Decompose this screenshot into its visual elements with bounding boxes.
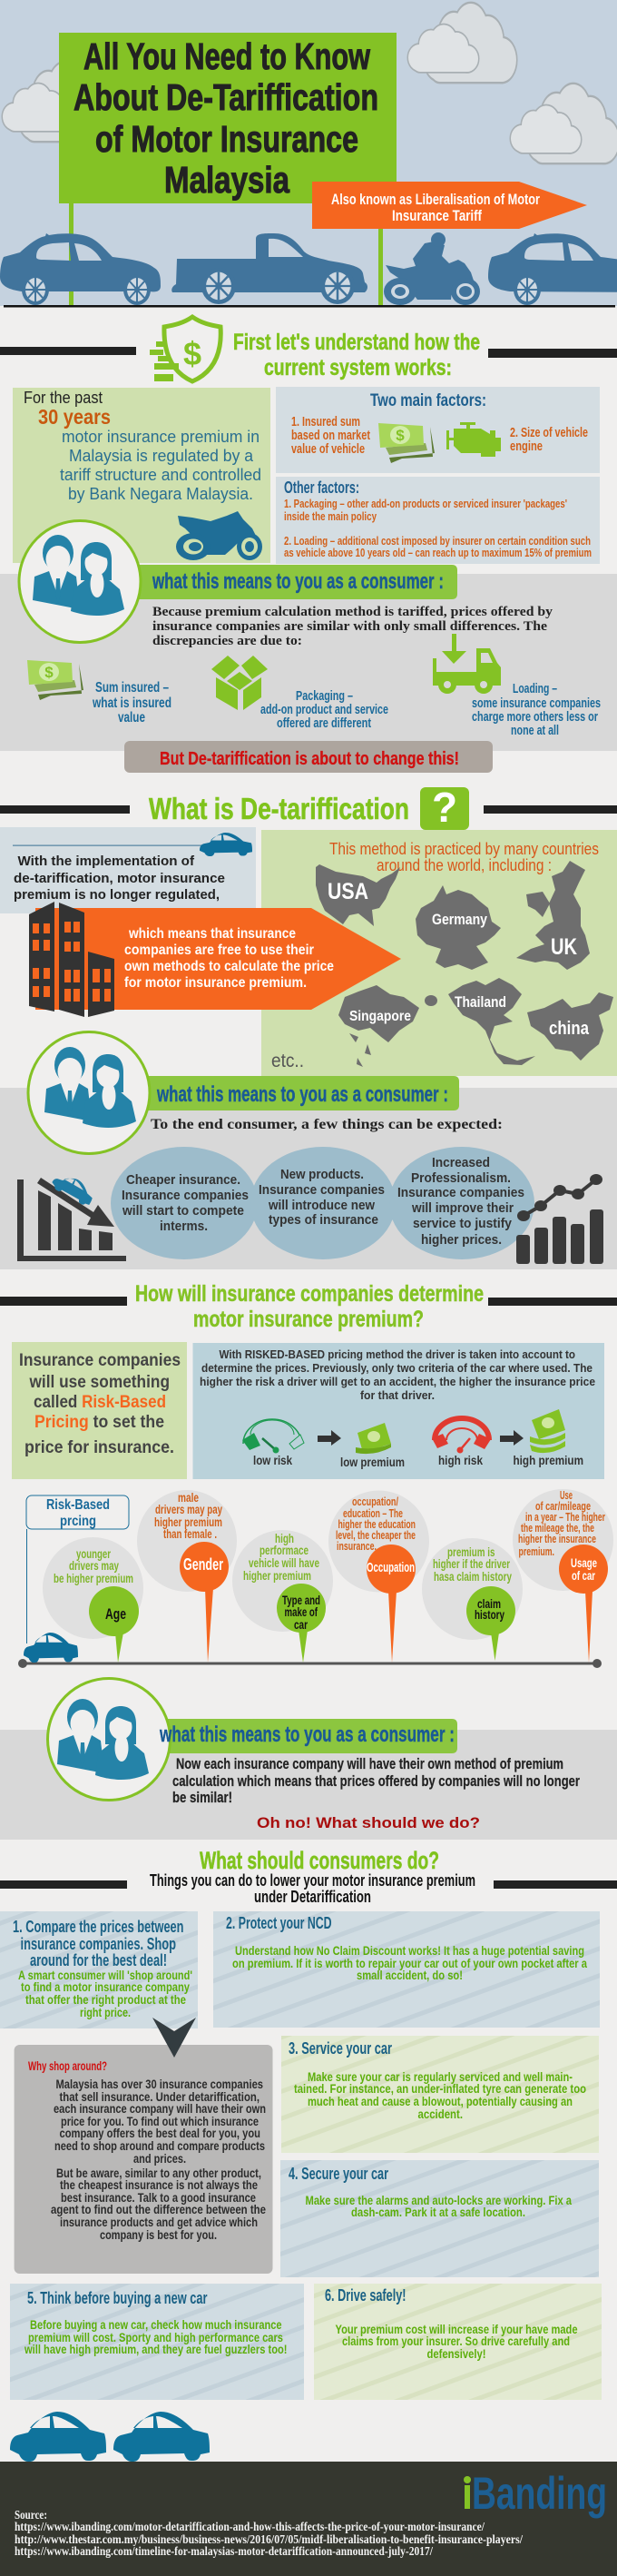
factor bubbles	[43, 1489, 613, 1640]
circle: cheaper insurance: will start to compete	[122, 1203, 244, 1219]
sum insured text	[92, 680, 171, 725]
band: consumer meaning 2: To the end consumer, a few things can be expected:	[151, 1117, 503, 1132]
orange arrow sign: Also known as Liberalisation of Motor	[331, 191, 540, 208]
icon: low premium money	[356, 1423, 391, 1454]
orange arrow: free to use own methods	[35, 908, 401, 1010]
cloud top right	[408, 4, 516, 82]
panel: tip 6 drive safely: defensively!	[426, 2347, 486, 2361]
gender text	[154, 1491, 222, 1541]
arrow text: own methods to calculate the price	[124, 959, 334, 974]
cloud left	[3, 63, 111, 141]
age text	[54, 1547, 133, 1585]
circle: professionalism: higher prices.	[421, 1232, 502, 1248]
claim text: premium is	[447, 1545, 495, 1559]
circle: professionalism: will improve their	[411, 1200, 514, 1216]
pin: age	[89, 1586, 139, 1663]
pin: usage of car: Usage	[571, 1555, 597, 1570]
sign poles	[69, 203, 383, 306]
circle: professionalism: service to justify	[413, 1216, 513, 1231]
panel: tip 5 new car: Before buying a new car, check how much insurance	[30, 2318, 282, 2332]
section heading: what is de-tariffication: What is De-tariffication	[149, 792, 409, 825]
banner: change	[124, 741, 493, 773]
section heading: first understand	[0, 317, 617, 381]
panel: why shop around: Why shop around?	[28, 2058, 107, 2073]
panel: tip 1 compare	[0, 1911, 198, 2028]
panel: risk-based pricing intro	[12, 1342, 187, 1479]
sources: http://www.thestar.com.my/business/business-news/2016/07/05/midf-liberalisation-to-benefit-insurance-players/	[15, 2533, 524, 2547]
circle: cheaper insurance: interms.	[160, 1219, 208, 1234]
map: USA: USA	[328, 879, 368, 904]
age text: drivers may	[69, 1559, 119, 1573]
why shop around text: But be aware, similar to any other product,	[56, 2166, 261, 2180]
map: Germany: Germany	[432, 911, 487, 928]
sum insured text: value	[118, 710, 145, 725]
timeline: risk-based pricing factors	[18, 1489, 613, 1668]
occupation text: education – The	[343, 1507, 403, 1520]
icon: car on arrow	[50, 1169, 97, 1209]
panel: tip 3 service	[281, 2036, 599, 2153]
panel: tip 6 drive safely: 6. Drive safely!	[325, 2285, 406, 2305]
arrow text: for motor insurance premium.	[124, 975, 307, 991]
panel: risk-based pricing intro: called Risk-Based	[34, 1393, 166, 1412]
icon: buildings	[29, 902, 114, 1017]
panel: countries: etc..	[271, 1051, 304, 1071]
footer	[0, 2462, 617, 2576]
occupation text	[336, 1495, 416, 1553]
band: consumer meaning 3	[0, 1678, 617, 1840]
band: consumer meaning 3: what this means to you as a consumer :	[159, 1722, 455, 1747]
loading text	[472, 681, 601, 738]
pin: claim history: claim	[477, 1596, 501, 1611]
map: Germany	[416, 885, 501, 970]
pin: usage of car: of car	[572, 1568, 595, 1583]
claim text: hasa claim history	[434, 1570, 512, 1584]
map: UK	[516, 861, 590, 970]
explanation paragraph: insurance companies are similar with only small differences. The	[152, 619, 547, 634]
band: consumer meaning 3: Oh no! What should we do?	[257, 1814, 480, 1831]
expectation circles	[111, 1147, 534, 1259]
sources: https://www.ibanding.com/timeline-for-malaysias-motor-detariffication-announced-july-2017/	[15, 2545, 434, 2559]
circle: professionalism: Professionalism.	[411, 1170, 511, 1186]
type text: vehicle will have	[249, 1556, 319, 1570]
regulation text: by Bank Negara Malaysia.	[68, 485, 253, 503]
heading text: current system works:	[264, 355, 452, 380]
panel: tip 3 service: 3. Service your car	[289, 2038, 392, 2058]
panel: two main factors: Two main factors:	[370, 391, 486, 410]
why shop around text: best insurance. Talk to a good insurance	[61, 2191, 256, 2205]
tip 1 text	[18, 1969, 192, 2019]
icon: high premium money	[530, 1409, 565, 1453]
title panel	[59, 33, 397, 203]
title: About De-Tariffication	[73, 76, 378, 118]
icon: sedan left	[0, 233, 161, 305]
map: China: china	[549, 1019, 590, 1039]
consumer pill: what this means to you as a consumer :	[152, 569, 444, 594]
usage text: premium.	[519, 1545, 554, 1558]
chart: rising prices	[516, 1174, 603, 1264]
panel: risk-based pricing intro: price for insurance.	[24, 1438, 174, 1457]
panel: tip 2 protect NCD: 2. Protect your NCD	[226, 1913, 332, 1932]
banner: change: But De-tariffication is about to change this!	[160, 749, 459, 769]
factor 2 text: 2. Size of vehicle	[510, 426, 588, 440]
gender text: male	[178, 1491, 199, 1505]
pin: usage of car	[559, 1545, 608, 1663]
circle: cheaper insurance	[111, 1147, 258, 1259]
pin: occupation	[367, 1545, 416, 1663]
panel: 30 years: 30 years	[38, 405, 111, 429]
gender text: higher premium	[154, 1515, 222, 1529]
implementation text	[14, 854, 225, 903]
arrow	[318, 1430, 341, 1446]
section heading: how will companies determine: motor insurance premium?	[193, 1307, 424, 1332]
pin: gender	[180, 1542, 229, 1663]
header scene	[0, 0, 617, 307]
occupation text: occupation/	[352, 1495, 398, 1508]
why shop around text: company is best for you.	[100, 2228, 217, 2242]
packaging text	[260, 688, 388, 731]
consequence paragraph	[172, 1755, 580, 1806]
panel: risked-based explanation: higher the risk a driver will get to an accident, the higher the insurance price	[200, 1375, 595, 1388]
circle: new products: types of insurance	[269, 1212, 378, 1228]
icon: box	[211, 656, 268, 710]
map: China	[527, 992, 613, 1061]
map: Thailand	[448, 978, 535, 1065]
ground line	[4, 305, 615, 307]
panel: risked-based explanation: With RISKED-BASED pricing method the driver is taken into account to	[220, 1347, 575, 1361]
icon: pickup	[171, 233, 367, 304]
why shop around text: company offers the best deal for you, you	[60, 2127, 260, 2140]
panel: tip 1 compare: insurance companies. Shop	[20, 1934, 176, 1953]
map: Singapore: Singapore	[349, 1009, 411, 1024]
icon: question box: ?	[432, 784, 457, 831]
cloud right	[511, 84, 617, 163]
risk-based label box	[26, 1495, 129, 1529]
panel: tip 2 protect NCD: small accident, do so!	[357, 1969, 463, 1982]
icon: motorbike with rider	[384, 232, 480, 305]
why shop around text: need to shop around and compare products	[54, 2139, 265, 2153]
icon: engine	[446, 422, 501, 457]
why shop around text	[51, 2078, 266, 2242]
pin: gender: Gender	[183, 1555, 223, 1574]
circle: professionalism: Insurance companies	[397, 1185, 524, 1200]
regulation text: tariff structure and controlled	[60, 466, 261, 484]
panel: why shop around	[15, 2045, 272, 2274]
panel: risk-based pricing intro: will use something	[29, 1373, 170, 1392]
factor 1 text: 1. Insured sum	[291, 415, 360, 429]
panel: 30 years: For the past	[24, 389, 103, 407]
sum insured text: what is insured	[92, 696, 171, 711]
heading text: First let's understand how the	[233, 330, 480, 355]
factor 1 text	[291, 415, 370, 457]
arrow: down to why shop around	[152, 2018, 196, 2058]
sources: Source:	[15, 2509, 47, 2522]
section heading: what should consumers do	[0, 1847, 617, 1906]
icon: shield with coins: $	[183, 335, 201, 372]
title: of Motor Insurance	[95, 118, 358, 160]
panel: risk-based pricing intro: Pricing to set the	[34, 1413, 164, 1432]
panel: risked-based explanation	[192, 1343, 604, 1479]
tip 1 text: A smart consumer will 'shop around'	[18, 1969, 192, 1982]
explanation paragraph	[152, 605, 553, 648]
panel: tip 4 secure: 4. Secure your car	[289, 2164, 388, 2183]
panel: other factors: Other factors:	[284, 479, 359, 497]
orange arrow sign: Insurance Tariff	[392, 207, 482, 224]
icon: money	[27, 660, 83, 700]
title: Malaysia	[164, 159, 290, 201]
icon: low risk gauge	[242, 1419, 304, 1453]
why shop around text: agent to find out the difference between the	[51, 2203, 266, 2216]
loading text: Loading –	[513, 681, 557, 696]
panel: tip 1 compare: around for the best deal!	[30, 1950, 167, 1969]
map: Thailand: Thailand	[455, 993, 506, 1011]
sources	[15, 2509, 524, 2559]
panel: implementation	[0, 827, 256, 913]
icon: sedan right	[488, 233, 617, 305]
age text: be higher premium	[54, 1572, 133, 1585]
occupation text: higher the education	[338, 1518, 416, 1531]
chart: falling prices	[17, 1169, 126, 1261]
panel: tip 4 secure: dash-cam. Park it at a safe location.	[351, 2206, 525, 2219]
title: All You Need to Know	[83, 35, 370, 77]
sources: https://www.ibanding.com/motor-detariffication-and-how-this-affects-the-price-of-your-motor-insurance/	[15, 2521, 485, 2534]
panel: tip 6 drive safely	[314, 2284, 602, 2400]
pin: type and make of car	[277, 1584, 326, 1663]
type text: high	[275, 1532, 294, 1545]
icon: question box	[420, 784, 469, 831]
risk-based label box: prcing	[60, 1514, 96, 1529]
panel: tip 1 compare: 1. Compare the prices between	[13, 1917, 183, 1936]
icon: small car	[200, 833, 252, 856]
why shop around text: insurance products and get advice which	[60, 2216, 258, 2229]
occupation text: insurance.	[337, 1540, 377, 1553]
tip 1 text: to find a motor insurance company	[21, 1980, 190, 1994]
panel: other factors	[276, 477, 600, 564]
consequence paragraph: be similar!	[172, 1789, 232, 1806]
risk labels: high risk	[438, 1453, 483, 1467]
map: Singapore	[338, 985, 437, 1067]
pin: occupation: Occupation	[367, 1560, 415, 1575]
circle: professionalism: Increased	[432, 1155, 490, 1170]
icon: high risk gauge	[432, 1418, 491, 1453]
countries text: around the world, including :	[377, 856, 552, 874]
pin: claim history	[466, 1586, 515, 1661]
circle: cheaper insurance: Cheaper insurance.	[126, 1172, 240, 1188]
risk labels: low risk	[253, 1453, 292, 1467]
pin: age: Age	[105, 1605, 126, 1623]
regulation text: motor insurance premium in	[62, 428, 260, 446]
section heading: how will companies determine	[0, 1281, 617, 1332]
why shop around text: that sell insurance. Under detariffication,	[60, 2090, 260, 2104]
icon: people circle	[47, 1678, 171, 1800]
consumer pill	[145, 1076, 459, 1110]
panel: risk-based pricing intro: Insurance companies	[19, 1351, 181, 1370]
packaging text: Packaging –	[296, 688, 353, 704]
icon: people circle	[28, 1031, 150, 1153]
arrow text	[124, 926, 334, 991]
icon: bottom cars	[10, 2412, 210, 2462]
factor 2 text	[510, 426, 588, 454]
circle: new products: Insurance companies	[259, 1182, 385, 1198]
arrow text: companies are free to use their	[124, 943, 314, 958]
icon: money	[378, 423, 435, 463]
pin: type and make of car: make of	[285, 1604, 318, 1619]
section heading: how will companies determine: How will insurance companies determine	[135, 1281, 484, 1307]
usage text: of car/mileage	[535, 1500, 591, 1513]
icon: people circle	[19, 521, 141, 643]
why shop around text: each insurance company will have their own	[54, 2102, 266, 2116]
countries text	[329, 840, 599, 874]
why shop around text: price for you. To find out which insurance	[61, 2115, 259, 2128]
risk labels: high premium	[514, 1453, 583, 1467]
factor 1 text: value of vehicle	[291, 442, 365, 457]
other factors text: inside the main policy	[284, 509, 377, 523]
sky background	[0, 0, 617, 306]
pin: claim history: history	[475, 1607, 504, 1622]
type text	[243, 1532, 319, 1583]
map: USA	[316, 864, 400, 926]
icon: timeline car	[24, 1633, 78, 1663]
risk-based label box: Risk-Based	[46, 1497, 110, 1513]
section heading: what should consumers do: What should consumers do?	[200, 1847, 439, 1874]
consumer pill: what this means to you as a consumer :	[156, 1082, 448, 1107]
timeline line	[18, 1659, 602, 1668]
circle: cheaper insurance: Insurance companies	[122, 1188, 249, 1203]
explanation paragraph: Because premium calculation method is tariffed, prices offered by	[152, 605, 553, 619]
panel: tip 2 protect NCD	[213, 1911, 600, 2028]
map: UK: UK	[551, 934, 577, 960]
section heading: what is de-tariffication	[0, 784, 617, 831]
regulation text: Malaysia is regulated by a	[69, 447, 254, 465]
loading text: none at all	[511, 723, 559, 738]
circle: professionalism	[389, 1147, 534, 1259]
packaging text: offered are different	[277, 716, 371, 731]
circle: new products: New products.	[280, 1167, 364, 1182]
usage text	[518, 1489, 605, 1558]
why shop around text: and prices.	[133, 2152, 186, 2166]
panel: two main factors	[276, 387, 600, 473]
icon: loading truck	[433, 634, 501, 694]
other factors text	[284, 497, 592, 559]
explanation paragraph: discrepancies are due to:	[152, 634, 302, 648]
factor 2 text: engine	[510, 439, 543, 454]
occupation text: level, the cheaper the	[336, 1529, 416, 1542]
section heading: what should consumers do: Things you can do to lower your motor insurance premium	[150, 1870, 475, 1890]
heading text	[233, 330, 480, 380]
panel: tip 5 new car	[10, 2284, 304, 2400]
orange arrow sign	[312, 182, 587, 229]
pin: type and make of car: Type and	[282, 1593, 320, 1607]
icon: motorbike	[176, 511, 262, 560]
arrow	[500, 1430, 524, 1446]
factor 1 text: based on market	[291, 429, 370, 443]
circle: new products: will introduce new	[268, 1198, 375, 1213]
implementation text: With the implementation of	[18, 854, 195, 869]
claim text	[433, 1545, 512, 1584]
panel: tip 5 new car: premium will cost. Sporty and high performance cars	[28, 2331, 283, 2344]
title	[73, 35, 378, 201]
packaging text: add-on product and service	[260, 702, 388, 717]
circle: new products	[250, 1147, 396, 1259]
tip 1 text: that offer the right product at the	[25, 1993, 186, 2007]
consumer pill	[163, 1719, 457, 1753]
usage text: Use	[560, 1489, 573, 1502]
age text: younger	[76, 1547, 112, 1561]
panel: tip 6 drive safely: claims from your insurer. So drive carefully and	[342, 2334, 570, 2348]
tip 1 text: right price.	[80, 2006, 131, 2019]
type text: higher premium	[243, 1569, 311, 1583]
type text: performace	[260, 1544, 308, 1557]
panel: countries	[261, 830, 617, 1076]
sum insured text: Sum insured –	[95, 680, 169, 696]
gender text: than female .	[163, 1527, 217, 1541]
regulation text	[60, 428, 261, 503]
why shop around text: the cheapest insurance is not always the	[60, 2178, 258, 2192]
panel: risked-based explanation: for that driver.	[360, 1388, 435, 1402]
panel: tip 5 new car: 5. Think before buying a new car	[27, 2288, 207, 2307]
risk labels	[253, 1453, 583, 1469]
implementation text: de-tariffication, motor insurance	[14, 871, 225, 886]
band: consumer meaning 2	[0, 1031, 617, 1269]
risk labels: low premium	[340, 1455, 405, 1469]
consumer pill	[136, 565, 457, 599]
arrow text: which means that insurance	[128, 926, 296, 942]
panel: tip 4 secure	[280, 2160, 599, 2277]
panel: tip 3 service: accident.	[417, 2107, 463, 2121]
icon: shield with coins	[150, 317, 220, 381]
claim text: higher if the driver	[433, 1557, 511, 1571]
panel: 30 years	[13, 388, 270, 563]
why shop around text: Malaysia has over 30 insurance companies	[56, 2078, 263, 2091]
implementation text: premium is no longer regulated,	[14, 887, 220, 903]
section heading: what should consumers do: under Detariffication	[254, 1887, 371, 1906]
panel: tip 5 new car: will have high premium, and they are fuel guzzlers too!	[24, 2343, 288, 2356]
gender text: drivers may pay	[155, 1503, 222, 1516]
pin: type and make of car: car	[294, 1617, 308, 1632]
band: consumer meaning 1	[0, 521, 617, 751]
